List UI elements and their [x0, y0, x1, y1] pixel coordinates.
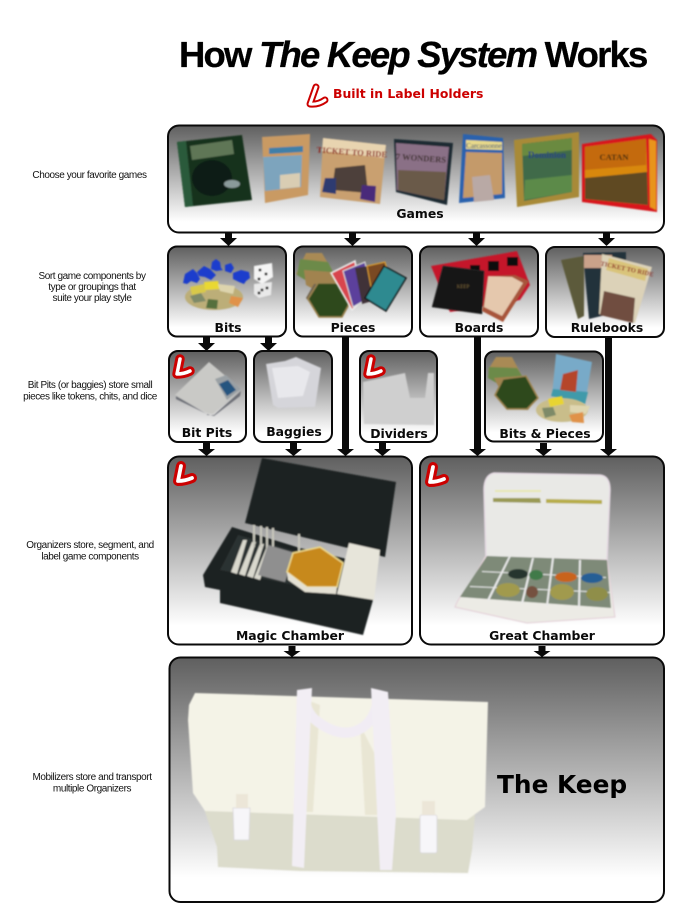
label: bits and pieces: Bits & Pieces	[499, 426, 591, 441]
panel: pieces	[294, 246, 412, 336]
game box: Arkham Horror	[177, 135, 252, 207]
side caption: mobilizers: multiple Organizers	[53, 784, 131, 794]
icon: label holder	[177, 359, 190, 374]
side caption: bit pits: Bit Pits (or baggies) store small	[28, 380, 152, 391]
icon: cards	[331, 261, 406, 311]
panel: the keep	[170, 658, 664, 902]
label: games: Games	[396, 206, 444, 221]
panel: bit pits	[169, 351, 246, 442]
icon: divider	[363, 373, 434, 425]
game box: Dominion: Dominion	[528, 150, 566, 160]
side caption: mobilizers: Mobilizers store and transport	[32, 772, 152, 783]
icon: label holder	[310, 87, 325, 104]
illustration: the keep bag	[188, 688, 488, 873]
icon: plastic bags	[266, 357, 321, 408]
game box: 7 Wonders: 7 WONDERS	[396, 151, 447, 165]
label: dividers: Dividers	[370, 426, 428, 441]
panel: rulebooks	[546, 247, 664, 337]
game box: Carcassonne	[459, 134, 505, 203]
panel: bits and pieces	[485, 352, 603, 442]
icon: dice	[254, 263, 273, 298]
side caption: sort components: Sort game components by	[38, 271, 146, 282]
side caption: organizers: label game components	[41, 552, 139, 562]
game box: Puerto Rico	[262, 134, 310, 203]
icon: bit pit tray	[175, 362, 241, 416]
game box: 7 Wonders	[394, 139, 453, 205]
icon: blue meeples	[183, 259, 250, 284]
side caption: bit pits: pieces like tokens, chits, and dice	[23, 392, 158, 402]
label: bit pits: Bit Pits	[182, 425, 232, 440]
panel: great chamber	[420, 456, 664, 644]
panel: boards	[420, 246, 538, 336]
label: magic chamber: Magic Chamber	[236, 628, 345, 643]
panel: games	[168, 126, 664, 232]
icon: open organizer	[455, 473, 615, 623]
icon: red game board	[431, 251, 530, 312]
panel: bits	[168, 246, 286, 336]
icon: ship card	[551, 354, 592, 404]
game box: Catan: CATAN	[600, 152, 629, 162]
panel: magic chamber	[168, 456, 412, 644]
label: boards: Boards	[455, 320, 503, 335]
icon: pile of chits	[185, 281, 243, 310]
game box: Catan	[582, 134, 657, 212]
icon: black board: KEEP	[457, 285, 469, 290]
panel: baggies	[254, 351, 332, 442]
label: great chamber: Great Chamber	[489, 628, 596, 643]
game box: Carcassonne: Carcassonne	[466, 142, 502, 150]
title: How The Keep System Works	[179, 34, 647, 75]
icon: pile of chits	[536, 396, 590, 423]
icon: label holder	[368, 359, 381, 374]
side caption: organizers: Organizers store, segment, and	[26, 540, 154, 551]
label: pieces: Pieces	[331, 320, 375, 335]
label: bits: Bits	[214, 320, 242, 335]
icon: label holder	[430, 467, 444, 482]
label: baggies: Baggies	[266, 424, 322, 439]
icon: hex tiles	[488, 357, 538, 410]
game box: Dominion	[514, 132, 579, 207]
label: rulebooks: Rulebooks	[571, 320, 643, 335]
arrows	[198, 233, 617, 657]
game box: Ticket to Ride	[317, 138, 388, 204]
side caption: choose games: Choose your favorite games	[32, 170, 147, 181]
panel: dividers	[360, 351, 437, 442]
side caption: sort components: suite your play style	[52, 293, 132, 304]
icon: rulebook stack: TICKET TO RIDE	[600, 260, 654, 279]
label: the keep: The Keep	[497, 770, 627, 799]
game box: Ticket to Ride: TICKET TO RIDE	[317, 145, 388, 159]
side caption: sort components: type or groupings that	[48, 282, 136, 293]
legend: built in label holders	[310, 86, 483, 104]
legend text: Built in Label Holders	[333, 86, 483, 101]
icon: label holder	[178, 466, 192, 481]
icon: hex tiles	[296, 253, 352, 317]
icon: black box with tiles	[203, 458, 396, 635]
icon: map board	[482, 275, 529, 322]
